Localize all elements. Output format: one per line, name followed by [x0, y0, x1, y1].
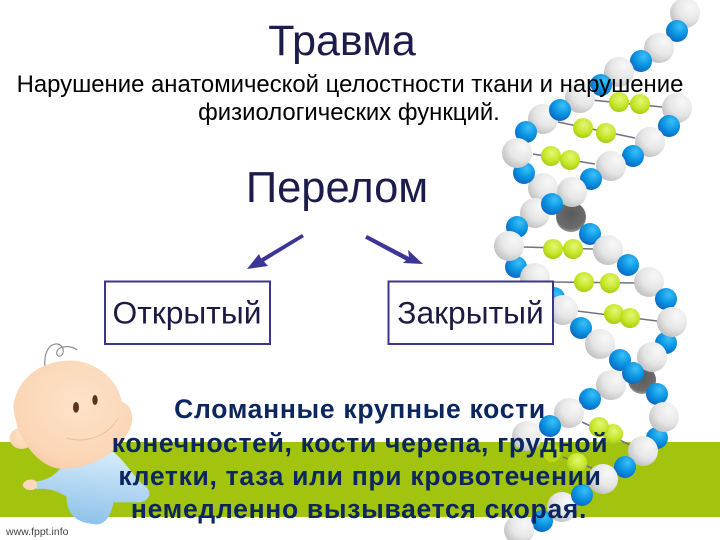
- bold text block: клетки, таза или при кровотечении: [118, 461, 602, 491]
- bold text block: немедленно вызывается скорая.: [131, 494, 587, 524]
- box: closed: [388, 282, 553, 344]
- DNA rungs: [523, 99, 662, 468]
- bold text block: конечностей, кости черепа, грудной: [112, 428, 608, 458]
- subtitle: Нарушение анатомической целостности ткани и нарушение: [17, 71, 683, 98]
- arrow left: [247, 234, 304, 269]
- baby eyes: [73, 402, 79, 413]
- heading: fracture: Перелом: [246, 164, 428, 212]
- baby head: [13, 361, 132, 468]
- baby body: [35, 452, 149, 524]
- footer url: www.fppt.info: [5, 526, 69, 538]
- DNA helix illustration: [494, 0, 700, 540]
- baby ear: [10, 428, 34, 449]
- DNA front strand: [494, 0, 700, 437]
- title: Травма: [268, 17, 416, 65]
- bold text block: Сломанные крупные кости: [174, 394, 546, 424]
- baby hand: [23, 479, 37, 490]
- baby smile: [67, 418, 118, 440]
- baby hair curl: [45, 344, 77, 367]
- arrow right: [365, 235, 423, 264]
- subtitle: физиологических функций.: [198, 99, 500, 126]
- green band: [0, 442, 720, 517]
- baby illustration: [10, 344, 149, 524]
- box: open: Открытый: [113, 294, 261, 330]
- box: open: [105, 282, 270, 344]
- box: closed: Закрытый: [397, 294, 544, 330]
- DNA back strand: [504, 162, 687, 540]
- DNA green base spheres: [541, 92, 650, 473]
